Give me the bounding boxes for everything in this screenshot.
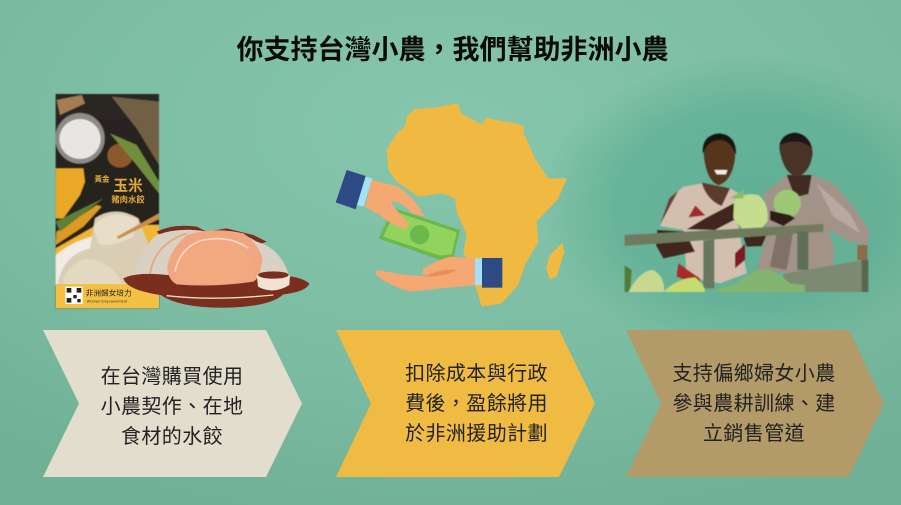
product package: Women Empowerment [87, 298, 128, 303]
package heading: 黃金 [94, 174, 110, 184]
photo: women farmers holding cabbages [625, 133, 868, 292]
step 2 text: 費後，盈餘將用 [405, 392, 548, 415]
plate of dumplings [123, 226, 309, 308]
man on right [757, 133, 868, 274]
step 3 text: 支持偏鄉婦女小農 [672, 362, 836, 385]
banknote [378, 208, 460, 260]
step 2 chevron [336, 330, 595, 477]
product package: 非洲婦女培力 [86, 288, 132, 298]
product package: 玉米 [113, 178, 143, 195]
step 3 text: 參與農耕訓練、建 [672, 392, 836, 415]
Madagascar [546, 243, 564, 279]
upper hand with cuff [336, 170, 425, 229]
woman on left [656, 133, 767, 285]
step 3 text: 立銷售管道 [703, 422, 805, 445]
step 2 text: 扣除成本與行政 [405, 362, 548, 385]
step 3 chevron [626, 330, 884, 477]
cabbages on the cart [625, 265, 805, 292]
illustration: dumpling package and plate [55, 94, 309, 308]
wooden fence [625, 224, 868, 292]
step 1 text: 在台灣購買使用 [101, 365, 243, 388]
step 1 text: 食材的水餃 [121, 425, 223, 448]
product package: 豬肉水餃 [111, 194, 145, 204]
step 2 text: 於非洲援助計劃 [405, 422, 548, 445]
Africa silhouette [387, 103, 567, 307]
product package [55, 94, 159, 308]
step 1 chevron [43, 330, 302, 477]
title: 你支持台灣小農，我們幫助非洲小農 [236, 34, 668, 65]
illustration: Africa map with hands exchanging money [336, 103, 567, 307]
step 1 text: 小農契作、在地 [101, 395, 243, 418]
lower hand with cuff [376, 257, 502, 292]
cabbages held [730, 189, 801, 234]
